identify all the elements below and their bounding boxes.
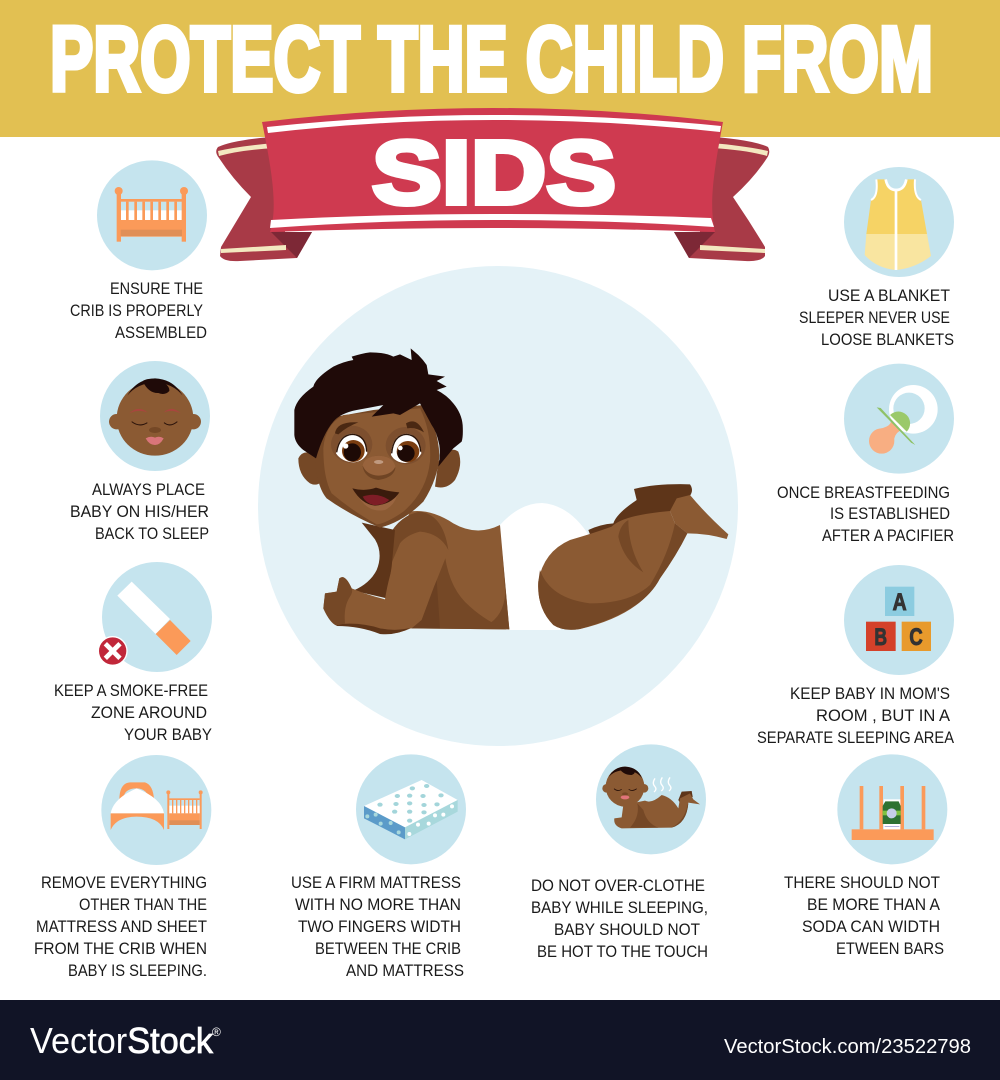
baby torso and arm <box>323 511 509 634</box>
label: do not over-clothe: BABY SHOULD NOT <box>554 921 700 939</box>
label: clear crib: MATTRESS AND SHEET <box>36 918 207 936</box>
panel: pacifier <box>777 364 954 545</box>
panel: firm mattress <box>291 754 466 980</box>
label: firm mattress: BETWEEN THE CRIB <box>315 940 461 958</box>
icon: bed and crib <box>101 755 211 865</box>
panel: crib bars <box>784 754 947 958</box>
label: pacifier: ONCE BREASTFEEDING <box>777 484 950 502</box>
label: crib bars: SODA CAN WIDTH <box>802 918 940 936</box>
label: crib: ASSEMBLED <box>115 324 207 342</box>
label: crib bars <box>784 874 944 958</box>
label: room sharing <box>757 685 954 747</box>
label: room sharing: ROOM , BUT IN A <box>816 707 950 725</box>
label: firm mattress: USE A FIRM MATTRESS <box>291 874 461 892</box>
label: crib bars: BE MORE THAN A <box>807 896 940 914</box>
label: crib: ENSURE THE <box>110 280 203 298</box>
icon: mattress <box>356 754 466 864</box>
label: smoke-free: KEEP A SMOKE-FREE <box>54 682 208 700</box>
label: do not over-clothe: BABY WHILE SLEEPING, <box>531 899 708 917</box>
label: firm mattress: WITH NO MORE THAN <box>295 896 461 914</box>
label: smoke-free: YOUR BABY <box>124 726 212 744</box>
baby diaper <box>500 503 590 630</box>
baby head <box>294 348 463 528</box>
label: crib bars: THERE SHOULD NOT <box>784 874 940 892</box>
label: do not over-clothe: BE HOT TO THE TOUCH <box>537 943 708 961</box>
label: back to sleep <box>70 481 209 543</box>
icon: small baby with steam <box>596 744 706 854</box>
label: blanket sleeper: USE A BLANKET <box>828 287 950 305</box>
icon: sleeper sack <box>844 167 954 277</box>
panel: back to sleep <box>70 361 210 543</box>
panel: do not over-clothe <box>531 744 708 961</box>
icon: sleeping baby head <box>100 361 210 471</box>
label: smoke-free: ZONE AROUND <box>91 704 207 722</box>
baby leg and foot <box>538 484 728 630</box>
label: clear crib <box>34 874 207 980</box>
label: crib: CRIB IS PROPERLY <box>70 302 203 320</box>
label: pacifier <box>777 484 954 545</box>
panel: crib assembled <box>70 160 207 342</box>
label: clear crib: BABY IS SLEEPING. <box>68 962 207 980</box>
label: smoke-free <box>54 682 212 744</box>
footer bar <box>0 1000 1000 1080</box>
label: firm mattress <box>291 874 464 980</box>
label: back to sleep: ALWAYS PLACE <box>92 481 205 499</box>
main baby illustration <box>294 348 728 634</box>
icon: ABC blocks: C <box>909 624 923 651</box>
central illustration background circle <box>258 266 738 746</box>
label: do not over-clothe: DO NOT OVER-CLOTHE <box>531 877 705 895</box>
ribbon: SIDS <box>216 108 769 261</box>
title banner <box>0 0 1000 137</box>
icon: ABC blocks: A <box>893 589 907 616</box>
label: pacifier: AFTER A PACIFIER <box>822 527 954 545</box>
icon: ABC blocks <box>844 565 954 675</box>
label: clear crib: OTHER THAN THE <box>79 896 207 914</box>
panel: room sharing <box>757 565 954 747</box>
icon: cigarette with cross <box>98 562 212 672</box>
label: blanket sleeper: SLEEPER NEVER USE <box>799 309 950 327</box>
panel: blanket sleeper <box>799 167 954 349</box>
label: crib <box>70 280 207 342</box>
label: blanket sleeper: LOOSE BLANKETS <box>821 331 954 349</box>
SIDS heading: SIDS <box>372 124 616 224</box>
panel: smoke-free <box>54 562 212 744</box>
footer registered mark: ® <box>212 1025 221 1039</box>
icon: crib <box>97 160 207 270</box>
label: firm mattress: TWO FINGERS WIDTH <box>298 918 461 936</box>
footer logo: VectorStock <box>30 1020 214 1061</box>
label: back to sleep: BABY ON HIS/HER <box>70 503 209 521</box>
icon: pacifier <box>844 364 954 474</box>
icon: ABC blocks: B <box>874 624 887 651</box>
label: clear crib: FROM THE CRIB WHEN <box>34 940 207 958</box>
label: room sharing: KEEP BABY IN MOM'S <box>790 685 950 703</box>
footer url: VectorStock.com/23522798 <box>724 1036 971 1058</box>
label: room sharing: SEPARATE SLEEPING AREA <box>757 729 954 747</box>
label: clear crib: REMOVE EVERYTHING <box>41 874 207 892</box>
label: blanket sleeper <box>799 287 954 349</box>
label: crib bars: ETWEEN BARS <box>836 940 944 958</box>
icon: soda can between bars <box>837 754 947 864</box>
panel: clear crib <box>34 755 211 980</box>
label: back to sleep: BACK TO SLEEP <box>95 525 209 543</box>
label: do not over-clothe <box>531 877 708 961</box>
label: firm mattress: AND MATTRESS <box>346 962 464 980</box>
label: pacifier: IS ESTABLISHED <box>830 505 950 523</box>
